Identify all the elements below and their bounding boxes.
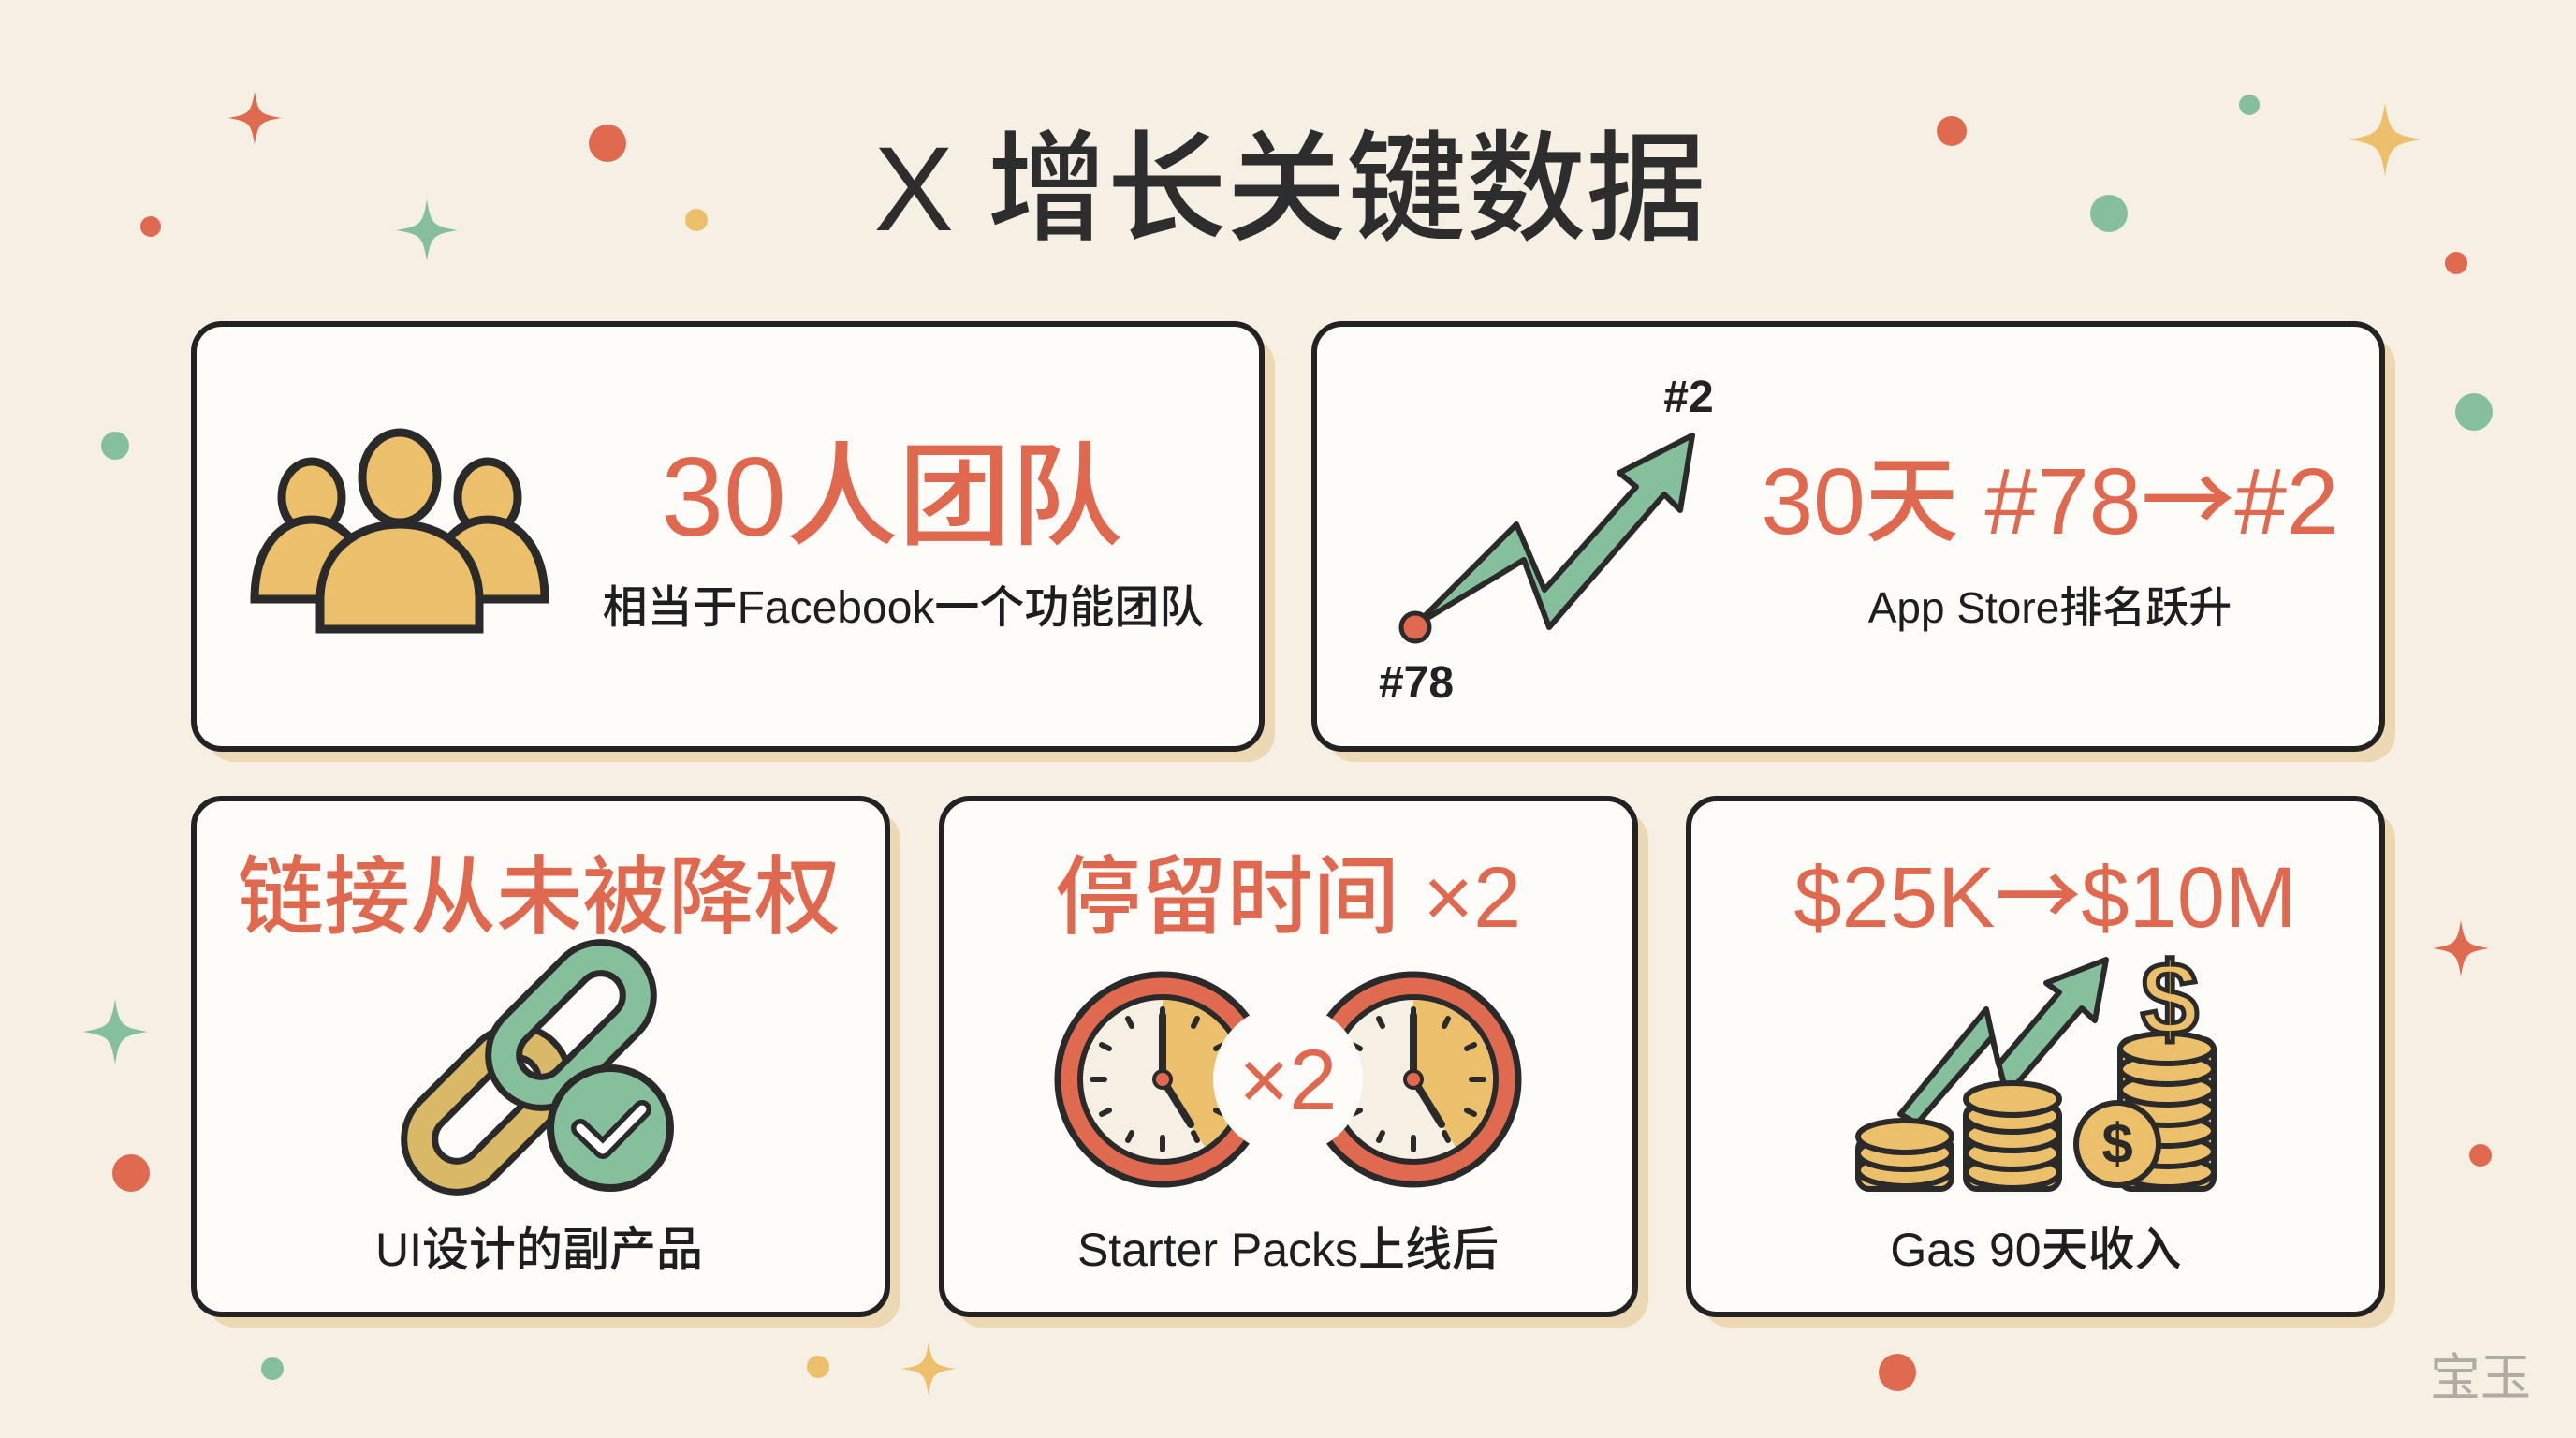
panel: links never downranked <box>194 799 900 1328</box>
headline: 30人团队 <box>661 434 1123 560</box>
panel: revenue: $ <box>2141 942 2199 1057</box>
panel: 30 person team <box>194 324 1275 762</box>
headline: 停留时间 ×2 <box>1055 850 1521 946</box>
icon: chain link with check <box>404 943 670 1192</box>
icon: two clocks: ×2 <box>1239 1033 1337 1128</box>
icon: people <box>255 433 545 629</box>
panel: revenue <box>1689 799 2395 1328</box>
headline: $25K→$10M <box>1793 828 2297 952</box>
chart: rising arrow: #78 <box>1379 658 1454 708</box>
icon: two clocks <box>1058 975 1518 1184</box>
chart: rising arrow <box>1379 373 1714 708</box>
subtitle: Starter Packs上线后 <box>1077 1224 1499 1276</box>
watermark: 宝玉 <box>2430 1350 2531 1406</box>
subtitle: App Store排名跃升 <box>1868 583 2232 632</box>
panel: dwell time x2 <box>942 799 1648 1328</box>
subtitle: UI设计的副产品 <box>375 1224 703 1276</box>
panel: app store ranking <box>1314 324 2395 762</box>
headline: 30天 #78→#2 <box>1761 425 2339 561</box>
icon: coins and growth arrow <box>1858 960 2214 1189</box>
subtitle: 相当于Facebook一个功能团队 <box>603 583 1204 633</box>
title: X 增长关键数据 <box>874 123 1705 257</box>
panel: revenue: $ <box>2101 1112 2133 1175</box>
headline: 链接从未被降权 <box>238 850 841 946</box>
subtitle: Gas 90天收入 <box>1890 1224 2182 1276</box>
chart: rising arrow: #2 <box>1663 373 1714 422</box>
